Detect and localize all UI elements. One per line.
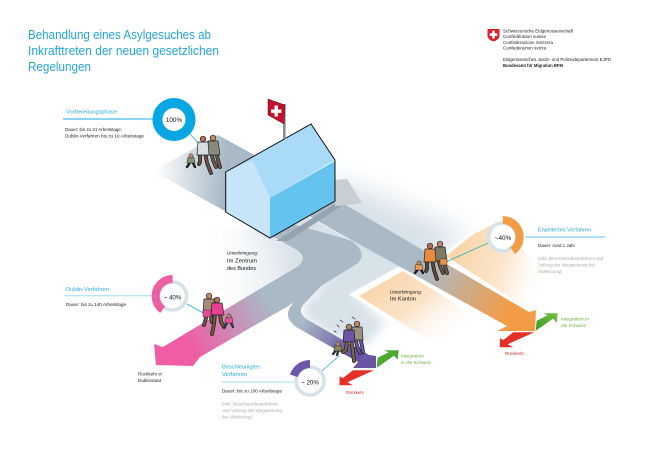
text: federal office names: Bundesamt für Migration BFM: [503, 63, 563, 68]
people: canton group: [415, 241, 447, 279]
text: federal office names: Confederaziun svizra: [503, 46, 547, 51]
text: federal office names: [503, 28, 611, 68]
road: extended procedure arrow: [310, 190, 536, 331]
title: Regelungen: [28, 59, 91, 74]
logo: Swiss confederation shield: [488, 29, 500, 42]
text: integration, extended procedure: Integration in: [561, 316, 589, 322]
chart: 100% ring: 100%: [166, 117, 182, 124]
panel: Erweitertes Verfahren: Erweitertes Verfahren: [538, 228, 591, 234]
chart: accelerated 20% ring: ~ 20%: [301, 380, 319, 386]
title: Inkrafttreten der neuen gesetzlichen: [28, 43, 219, 58]
text: accommodation canton: Unterbringung:: [390, 290, 422, 296]
text: accommodation federal centre: [227, 250, 258, 272]
text: integration, accelerated procedure: [401, 354, 432, 366]
people: preparation group: [187, 135, 220, 173]
text: federal office names: Schweizerische Eidgenossenschaft: [503, 28, 574, 34]
chart: accelerated 20% ring: [290, 356, 339, 395]
text: integration, accelerated procedure: Integration: [401, 354, 424, 360]
road divider and house shadows: [276, 179, 362, 241]
panel: Dublin-Verfahren: Dauer: bis zu 140 Arbeitstage: [66, 302, 126, 308]
panel: Vorbereitungsphase: Dublin-Verfahren bis zu 10 Arbeitstage: [65, 134, 144, 140]
text: integration, extended procedure: [561, 316, 589, 329]
panel: Kanton plate: [350, 222, 552, 346]
text: return to Dublin state: [138, 372, 162, 384]
people: accelerated group: [333, 317, 363, 361]
background glow: [195, 180, 470, 345]
chart: extended 40% ring: [446, 216, 524, 262]
text: return to Dublin state: Dublinstaat: [138, 378, 162, 384]
arrow: integration, extended procedure: [536, 313, 558, 331]
text: accommodation federal centre: Unterbringung:: [227, 250, 258, 256]
road: accelerated procedure arrow: [288, 285, 376, 368]
panel: Erweitertes Verfahren: Ablehnung): [538, 269, 562, 275]
panel: Erweitertes Verfahren: Vollzug der Wegweisung bei: [538, 262, 595, 268]
road: preparation phase: [153, 135, 258, 212]
people: Dublin group: [203, 293, 233, 334]
panel: Beschleunigtes Verfahren: Verfahren: [222, 372, 247, 378]
panel: Erweitertes Verfahren: (inkl. Beschwerdeverfahren und: [538, 256, 603, 262]
text: accommodation canton: [390, 290, 422, 302]
text: federal office names: Confédération suisse: [503, 34, 547, 39]
title: [28, 27, 219, 74]
text: return to Dublin state: Rückkehr in: [138, 372, 162, 378]
chart: extended 40% ring: ~40%: [495, 235, 512, 242]
arrow: return, extended procedure: [500, 332, 534, 347]
panel: Vorbereitungsphase: [63, 110, 155, 140]
arrow: return, accelerated procedure: [339, 370, 374, 385]
text: integration, extended procedure: die Schweiz: [561, 323, 587, 329]
text: federal office names: Confederazione Svizzera: [503, 40, 554, 45]
panel: Vorbereitungsphase: Vorbereitungsphase: [66, 110, 117, 116]
panel: Erweitertes Verfahren: [525, 228, 605, 275]
text: integration, accelerated procedure: in die Schweiz: [401, 360, 432, 366]
panel: Beschleunigtes Verfahren: und Vollzug der Wegweisung: [222, 408, 282, 414]
panel: Erweitertes Verfahren: Dauer: rund 1 Jahr: [538, 243, 575, 249]
panel: Beschleunigtes Verfahren: Beschleunigtes: [222, 364, 260, 370]
text: federal office names: Eidgenössisches Justiz- und Polizeidepartement EJPD: [503, 57, 611, 62]
panel: Beschleunigtes Verfahren: Dauer: bis zu 100 Arbeitstage: [222, 388, 282, 394]
text: accommodation canton: Im Kanton: [390, 296, 416, 302]
panel: Beschleunigtes Verfahren: (inkl. Beschwerdeverfahren: [222, 402, 278, 408]
road: Dublin procedure arrow: [154, 222, 362, 366]
panel: Vorbereitungsphase: Dauer: bis zu 21 Arbeitstage;: [65, 127, 122, 133]
text: accommodation federal centre: Im Zentrum: [227, 258, 257, 264]
title: Behandlung eines Asylgesuches ab: [28, 27, 211, 42]
chart: Dublin 40% ring: ~ 40%: [164, 294, 182, 302]
chart: Dublin 40% ring: [152, 275, 205, 314]
panel: Dublin-Verfahren: Dublin-Verfahren: [66, 287, 109, 293]
text: accommodation federal centre: des Bundes: [227, 266, 256, 272]
arrow: integration, accelerated procedure: [377, 350, 399, 368]
chart: 100% ring: [158, 103, 201, 146]
panel: Beschleunigtes Verfahren: [222, 364, 295, 420]
panel: Dublin-Verfahren: [64, 287, 152, 308]
text: return, extended procedure: Rückkehr: [505, 351, 524, 357]
icon: Swiss flag: [268, 99, 286, 139]
house: [226, 124, 335, 238]
panel: Beschleunigtes Verfahren: bei Ablehnung): [222, 414, 252, 420]
text: return, accelerated procedure: Rückkehr: [346, 390, 364, 396]
